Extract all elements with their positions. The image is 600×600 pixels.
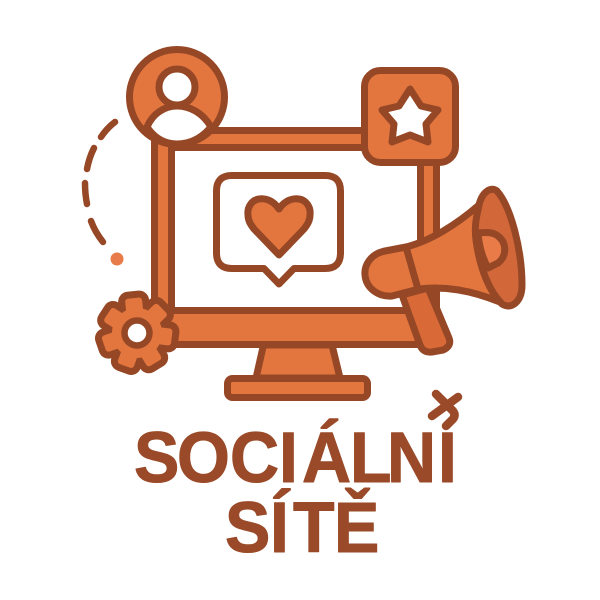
title line 2: SÍTĚ [225, 486, 379, 567]
bubble outline [216, 176, 340, 284]
heart [248, 199, 310, 255]
icon: star badge [364, 70, 456, 162]
gear fill [101, 297, 173, 369]
icon: dashed orbit [85, 122, 115, 242]
megaphone collar [406, 247, 418, 289]
title [134, 417, 457, 567]
monitor stand [256, 345, 340, 378]
avatar head [159, 69, 195, 105]
star [382, 89, 438, 142]
icon: megaphone [365, 189, 522, 352]
icon: monitor [154, 130, 436, 398]
monitor frame [154, 130, 436, 344]
megaphone bump [478, 232, 505, 268]
icon: gear [101, 297, 173, 369]
icon: user avatar [130, 50, 224, 144]
avatar body [147, 106, 211, 144]
title line 1: SOCIÁLNI [134, 417, 457, 497]
megaphone body [365, 205, 500, 302]
megaphone bell [475, 189, 522, 306]
icon: orbit dot [110, 252, 124, 266]
gear outline [101, 297, 173, 369]
avatar disc [130, 50, 224, 144]
gear hole [124, 320, 150, 346]
monitor base [228, 378, 368, 398]
megaphone handle [402, 288, 450, 352]
badge square [364, 70, 456, 162]
icon: cross mark [432, 394, 458, 426]
speech bubble with heart [216, 176, 340, 284]
